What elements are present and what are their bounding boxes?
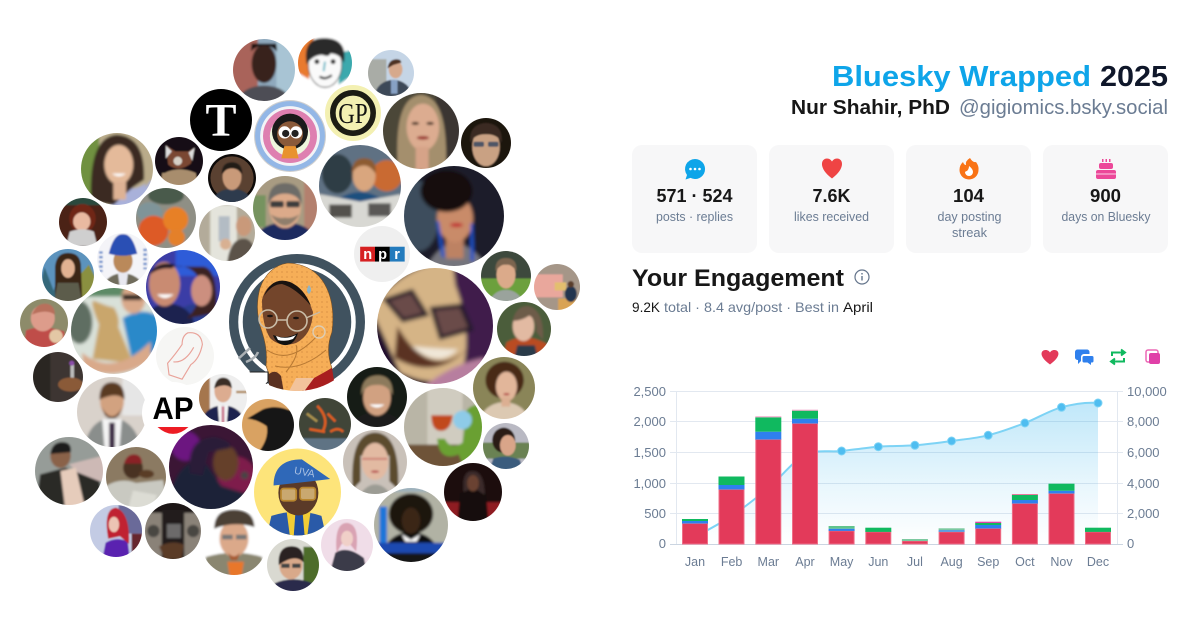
month labels: Jul <box>907 555 923 569</box>
left axis labels: 2,500 <box>633 384 666 399</box>
avatar: woman in dark dress <box>438 457 508 528</box>
left axis labels: 0 <box>659 536 666 551</box>
avatar: main user illustration <box>229 254 365 393</box>
user name and handle: @gigiomics.bsky.social <box>959 97 1168 119</box>
avatar: man holding dog <box>71 288 157 374</box>
avatar: man in blue party hat <box>97 233 149 285</box>
heading: Your Engagement: Your Engagement <box>632 265 844 292</box>
icon: reposts legend <box>1111 350 1125 364</box>
avatar: hand holding camera <box>139 497 207 565</box>
avatar: GP monogram <box>325 85 381 141</box>
engagement summary: April <box>843 299 873 315</box>
right axis labels <box>1127 384 1167 551</box>
left axis labels <box>633 384 666 551</box>
engagement summary: 9.2K <box>632 299 661 315</box>
user name and handle: Nur Shahir, PhD <box>791 97 950 119</box>
panel: day posting streak: day posting <box>938 209 1002 224</box>
left axis labels: 500 <box>644 506 666 521</box>
avatar: woman with curly auburn hair <box>467 351 541 425</box>
panel: likes received <box>769 145 894 253</box>
cumulative area <box>695 403 1098 544</box>
avatar: New York Times logo <box>190 89 252 151</box>
avatar: man at poster <box>199 205 255 261</box>
avatar: pink haired drawing <box>316 514 378 576</box>
month labels: Mar <box>758 555 779 569</box>
panel: likes received: 7.6K <box>812 186 850 206</box>
chart: monthly engagement <box>633 384 1167 569</box>
month labels: May <box>830 555 854 569</box>
avatar: speaker by slide <box>534 264 580 310</box>
avatar: woman with blue earrings <box>404 166 504 266</box>
user name and handle <box>791 97 1168 119</box>
panel: posts and replies: posts · replies <box>656 209 733 224</box>
month labels: Jan <box>685 555 705 569</box>
month labels: Nov <box>1050 555 1073 569</box>
month labels: Dec <box>1087 555 1109 569</box>
avatar: man in grey suit <box>77 377 145 447</box>
avatar: couple selfie <box>146 250 220 324</box>
month labels: Aug <box>940 555 963 569</box>
icon: flame <box>960 158 979 180</box>
cumulative line <box>695 403 1098 537</box>
right axis labels: 4,000 <box>1127 476 1160 491</box>
avatar: man in red cap <box>100 441 172 513</box>
avatar: illustrated face <box>298 36 352 90</box>
avatar: man with dreadlocks at microphone <box>161 417 261 517</box>
icon: quotes legend <box>1146 350 1160 364</box>
avatar: man in flat cap <box>194 502 274 582</box>
avatar: red line sketch <box>156 327 214 385</box>
avatar: GP monogram: GP <box>338 99 368 130</box>
avatar: Kermit with mask and tea <box>396 380 492 476</box>
avatar: AP logo <box>142 382 192 434</box>
title: Bluesky Wrapped <box>832 61 1091 93</box>
engagement summary: total · 8.4 avg/post · Best in <box>664 299 839 315</box>
avatar: baby in red <box>20 299 68 347</box>
panel: days on Bluesky: days on Bluesky <box>1062 209 1151 224</box>
left axis labels: 1,000 <box>633 476 666 491</box>
avatar: smiling brunette woman <box>81 133 153 205</box>
avatar: pumpkins <box>136 188 196 248</box>
panel: posts and replies: 571 · 524 <box>656 186 732 206</box>
avatar: woman selfie <box>383 93 459 169</box>
chart legend icons <box>1042 350 1160 365</box>
right axis labels: 10,000 <box>1127 384 1167 399</box>
avatar: man in navy suit <box>199 374 247 422</box>
avatar: AP logo: AP <box>153 390 193 426</box>
month labels: Apr <box>795 555 815 569</box>
avatar: New York Times logo: T <box>205 96 237 147</box>
panel: days on Bluesky: 900 <box>1090 186 1121 206</box>
panel: avatar bubble cloud <box>15 31 585 596</box>
avatar: woman in denim jacket <box>478 418 534 474</box>
right axis labels: 8,000 <box>1127 414 1160 429</box>
right axis labels: 0 <box>1127 536 1134 551</box>
avatar: crow <box>242 399 294 451</box>
month labels: Feb <box>721 555 742 569</box>
panel: posts and replies <box>632 145 757 253</box>
avatar: man with grey hoodie <box>233 39 295 101</box>
avatar: red panda <box>155 137 203 185</box>
month labels: Sep <box>977 555 999 569</box>
icon: heart <box>822 158 842 178</box>
month labels: Jun <box>868 555 888 569</box>
icon: replies legend <box>1075 350 1094 365</box>
avatar: woman on TV <box>367 481 455 572</box>
avatar: person with short hair and glasses <box>262 534 324 596</box>
month labels: Oct <box>1015 555 1035 569</box>
avatar: powerpuff character in pride rings <box>254 100 326 172</box>
avatar: man with curly hair on lawn <box>481 251 531 301</box>
avatar: man reading newspaper <box>319 145 401 227</box>
panel: day posting streak <box>906 145 1031 253</box>
left axis labels: 2,000 <box>633 414 666 429</box>
panel: day posting streak: 104 <box>953 186 984 206</box>
left axis labels: 1,500 <box>633 445 666 460</box>
avatar: man in dark jacket on bed <box>28 430 110 512</box>
avatar: smiling man with beard and glasses <box>253 176 317 240</box>
icon: chat bubble <box>685 159 705 180</box>
avatar: man at capitol <box>368 50 414 96</box>
icon ring <box>229 254 365 390</box>
avatar: man in glasses, dark background <box>461 118 511 168</box>
month labels <box>685 555 1109 569</box>
character <box>237 263 336 393</box>
right axis labels: 6,000 <box>1127 445 1160 460</box>
avatar: mural with orange lines <box>299 398 351 450</box>
line markers <box>838 399 1102 455</box>
icon: likes legend <box>1042 350 1058 364</box>
right axis labels: 2,000 <box>1127 506 1160 521</box>
title: 2025 <box>1100 61 1168 93</box>
icon: birthday cake <box>1096 159 1116 179</box>
avatar: woman with round glasses <box>337 424 413 500</box>
avatar: woman with agave plants <box>42 249 94 301</box>
avatar: smiling blond man <box>347 367 407 427</box>
avatar: NPR logo <box>354 226 410 282</box>
panel: days on Bluesky <box>1043 145 1168 253</box>
avatar: cartoon man in UVA cap <box>245 440 350 544</box>
panel: day posting streak: streak <box>952 225 987 240</box>
icon: info <box>855 270 869 284</box>
avatar: hand holding vial <box>33 352 83 402</box>
avatar: woman with red hair <box>85 500 147 562</box>
bars: stacked monthly <box>682 410 1111 544</box>
avatar: woman with orange jacket <box>497 302 551 356</box>
avatar: toddler with red hair <box>59 198 107 246</box>
panel: likes received: likes received <box>794 209 869 224</box>
avatar: man on brown background <box>208 154 256 202</box>
avatar: laughing man in thick glasses <box>377 268 493 384</box>
